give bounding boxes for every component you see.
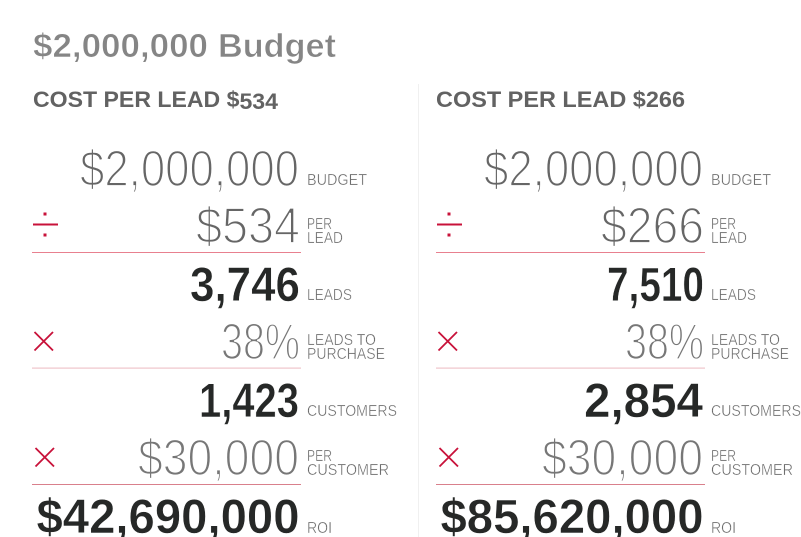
row: lead to purchase: 38%: [221, 313, 300, 370]
row: per customer: $30,000: [542, 429, 703, 486]
panel divider: [418, 84, 419, 537]
row: lead to purchase: LEADS TO: [307, 332, 376, 349]
heading: cost per lead 266: COST PER LEAD $266: [436, 87, 685, 112]
icon: multiply: [438, 332, 457, 350]
heading: cost per lead 534: 534: [239, 89, 279, 114]
panel: left scenario: [32, 87, 397, 537]
row: leads: LEADS: [307, 287, 352, 304]
row: cost per lead: PER: [711, 216, 736, 233]
row: customers: CUSTOMERS: [307, 403, 397, 420]
title: Budget: [218, 27, 336, 64]
row: per customer: CUSTOMER: [307, 462, 389, 479]
icon: divide: [33, 212, 58, 236]
row: per customer: CUSTOMER: [711, 462, 793, 479]
row: customers: [199, 375, 397, 428]
row: cost per lead: $266: [601, 197, 704, 254]
row: lead to purchase: PURCHASE: [711, 346, 789, 363]
row: budget: $2,000,000: [484, 140, 703, 197]
row: customers: [584, 375, 801, 428]
row: per customer: $30,000: [138, 429, 299, 486]
row: customers: 2,854: [584, 375, 703, 428]
row: cost per lead: PER: [307, 216, 332, 233]
heading: cost per lead 534: COST PER LEAD $: [33, 87, 230, 112]
title: [33, 27, 336, 64]
row: budget: $2,000,000: [80, 140, 299, 197]
row: cost per lead: LEAD: [307, 230, 343, 247]
row: lead to purchase: LEADS TO: [711, 332, 780, 349]
row: leads: LEADS: [711, 287, 756, 304]
panel: right scenario: [436, 87, 801, 537]
icon: multiply: [34, 332, 53, 350]
row: cost per lead: $534: [196, 197, 300, 254]
row: lead to purchase: 38%: [625, 313, 704, 370]
row: cost per lead: LEAD: [711, 230, 747, 247]
row: roi: ROI: [307, 520, 332, 537]
row: per customer: PER: [711, 448, 736, 465]
row: budget: BUDGET: [711, 172, 771, 189]
row: roi: ROI: [711, 520, 736, 537]
row: budget: BUDGET: [307, 172, 367, 189]
icon: multiply: [36, 448, 54, 466]
icon: divide: [437, 212, 462, 236]
row: lead to purchase: [221, 313, 385, 370]
row: leads: 3,746: [190, 259, 300, 312]
row: lead to purchase: PURCHASE: [307, 346, 385, 363]
icon: multiply: [440, 448, 458, 466]
title: $2,000,000: [33, 27, 208, 64]
row: lead to purchase: [625, 313, 789, 370]
row: leads: 7,510: [607, 259, 704, 312]
row: per customer: PER: [307, 448, 332, 465]
row: customers: 1,423: [199, 375, 299, 428]
